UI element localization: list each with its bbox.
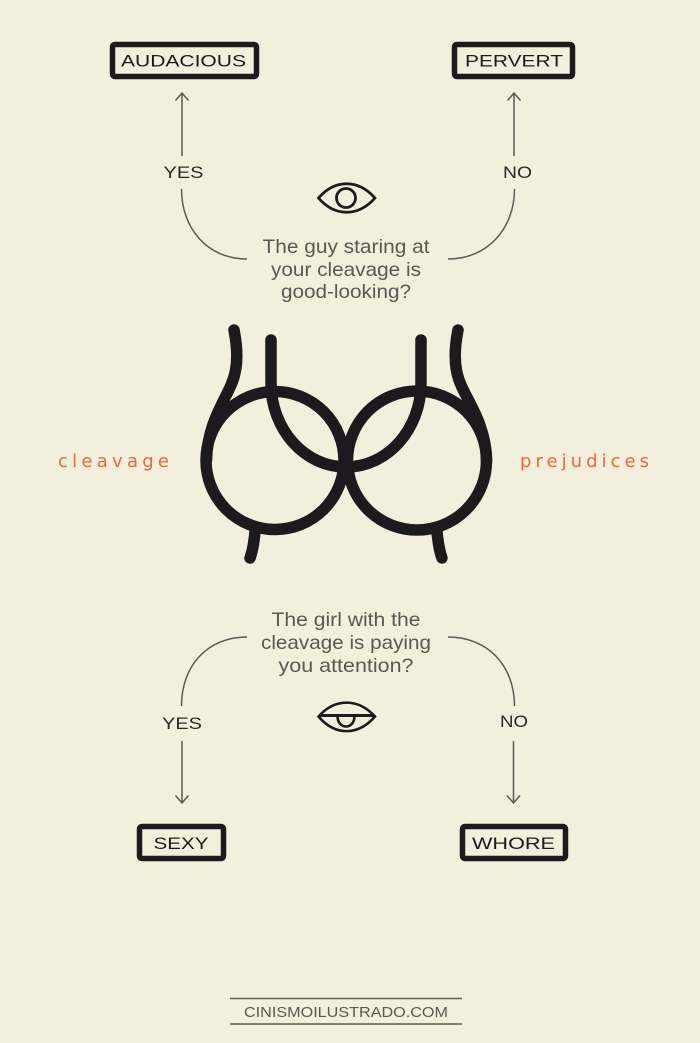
arrow: top right no up <box>448 93 520 259</box>
box: AUDACIOUS <box>112 44 256 76</box>
text: top question: The guy staring at <box>262 236 430 258</box>
text: top question <box>262 236 430 303</box>
arrow: bottom left yes down <box>176 637 247 803</box>
arrow: top left yes up <box>176 93 247 259</box>
label: top NO: NO <box>503 163 532 182</box>
text: top question: your cleavage is <box>271 259 421 281</box>
text: bottom question: cleavage is paying <box>261 632 431 654</box>
label: bottom NO: NO <box>500 712 528 731</box>
footer: site credit: CINISMOILUSTRADO.COM <box>244 1004 448 1021</box>
box: PERVERT <box>454 44 572 76</box>
box: AUDACIOUS: AUDACIOUS <box>121 52 246 70</box>
text: bottom question <box>261 609 431 677</box>
text: bottom question: you attention? <box>278 655 414 677</box>
arrow: bottom right no down <box>448 637 520 803</box>
box: WHORE <box>462 826 566 858</box>
icon: half-closed eye <box>318 703 375 731</box>
footer: site credit <box>230 998 462 1024</box>
text: top question: good-looking? <box>281 281 411 303</box>
box: WHORE: WHORE <box>472 834 555 853</box>
label: cleavage: cleavage <box>58 451 169 472</box>
icon: open eye <box>318 184 375 212</box>
illustration: breasts <box>206 330 486 558</box>
label: prejudices: prejudices <box>520 451 649 472</box>
box: PERVERT: PERVERT <box>465 52 563 70</box>
box: SEXY: SEXY <box>154 834 208 853</box>
label: top YES: YES <box>164 163 204 182</box>
box: SEXY <box>140 826 224 858</box>
label: bottom YES: YES <box>162 714 202 733</box>
text: bottom question: The girl with the <box>272 609 420 631</box>
